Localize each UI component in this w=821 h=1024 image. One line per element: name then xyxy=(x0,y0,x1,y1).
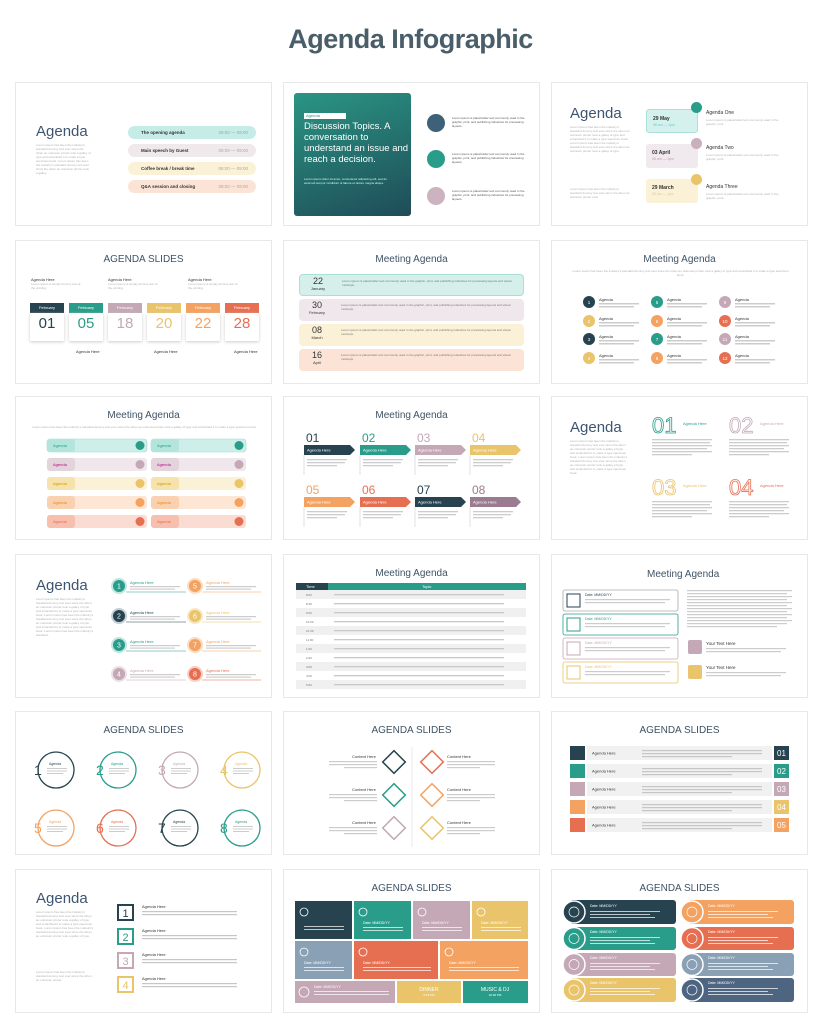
panel: slide 10 numbered circles list xyxy=(15,554,272,698)
panel: slide 1 agenda pills: Main speech by Guest xyxy=(141,148,189,153)
panel: slide 14 diamonds: Content Here xyxy=(352,754,377,759)
panel: slide 8 numbered arrows: 05 xyxy=(306,483,320,497)
panel: slide 8 numbered arrows: Meeting Agenda xyxy=(375,410,448,421)
panel: slide 2 discussion topics xyxy=(283,82,540,226)
panel: slide 14 diamonds: Content Here xyxy=(447,820,472,825)
panel: slide 3 agenda dates: Agenda Three xyxy=(706,184,738,190)
panel: slide 4 february dates: February xyxy=(78,305,94,310)
panel: slide 8 numbered arrows: Agenda Here xyxy=(418,448,442,452)
panel: slide 13 eight ring circles: Agenda xyxy=(173,820,185,824)
panel: slide 6 twelve agenda circles: Agenda xyxy=(735,297,750,302)
panel: slide 8 numbered arrows: Agenda Here xyxy=(473,500,497,504)
panel: slide 6 twelve agenda circles: 12 xyxy=(722,356,728,361)
panel: slide 12 calendar list: Date: MM/DD/YY xyxy=(585,617,613,621)
panel: slide 13 eight ring circles: Agenda xyxy=(49,762,61,766)
panel: slide 6 twelve agenda circles: 2 xyxy=(588,319,591,324)
panel: slide 3 agenda dates: Lorem ipsum has been the industry's standard dummy text ever since the when an unknown printer took a galley of type and scrambled it to make a type specimen book. Lorem ipsum has been the industry's standard dummy text ever since the when an unknown printer took a galley of type. xyxy=(570,125,630,153)
panel: slide 6 twelve agenda circles: 8 xyxy=(656,356,659,361)
panel: slide 7 two-column agenda pills: Agenda xyxy=(53,481,68,486)
panel: slide 18 two-column pills: Date: MM/DD/YY xyxy=(590,981,618,985)
panel: slide 5 meeting agenda dates: Meeting Agenda xyxy=(375,254,448,265)
panel: slide 15 icon rows with numbers: 02 xyxy=(777,767,786,776)
panel: slide 11 time table: 10:30 xyxy=(306,629,314,633)
panel: slide 6 twelve agenda circles: 1 xyxy=(588,300,591,305)
panel: slide 16 numbered squares xyxy=(15,869,272,1013)
panel: slide 6 twelve agenda circles: 5 xyxy=(656,300,659,305)
panel: slide 14 diamonds: Content Here xyxy=(352,787,377,792)
panel: slide 7 two-column agenda pills: Agenda xyxy=(53,500,68,505)
panel: slide 6 twelve agenda circles: 11 xyxy=(723,337,728,342)
panel: slide 15 icon rows with numbers: Agenda Here xyxy=(592,822,616,828)
panel: slide 3 agenda dates: Agenda One xyxy=(706,110,734,116)
panel: slide 9 outline numbers: Agenda Here xyxy=(683,483,707,488)
panel: slide 7 two-column agenda pills: Agenda xyxy=(53,462,68,467)
panel: slide 18 two-column pills: Date: MM/DD/YY xyxy=(708,956,736,960)
panel: slide 3 agenda dates: Lorem ipsum is placeholder text commonly used in the graphic, print. xyxy=(706,118,778,126)
panel: slide 12 calendar list: Meeting Agenda xyxy=(647,569,719,580)
panel: slide 4 february dates: 01 xyxy=(39,315,55,332)
panel: slide 7 two-column agenda pills xyxy=(15,396,272,540)
panel: slide 2 discussion topics: Lorem ipsum dolor sit amet, consectetur adipiscing elit, sed do eiusmod tempor incididunt ut labore et dolore magna aliqua. xyxy=(304,177,387,185)
panel: slide 4 february dates: February xyxy=(234,305,250,310)
panel: slide 3 agenda dates: 08 am — 1pm xyxy=(653,123,675,127)
panel: slide 3 agenda dates: 08 am — 1pm xyxy=(652,192,674,196)
panel: slide 8 numbered arrows: 04 xyxy=(472,431,486,445)
panel: slide 13 eight ring circles: 7 xyxy=(158,820,166,836)
panel: slide 10 numbered circles list: 4 xyxy=(117,672,121,678)
panel: slide 13 eight ring circles: Agenda xyxy=(111,762,123,766)
panel: slide 3 agenda dates: 29 March xyxy=(652,185,674,191)
panel: slide 8 numbered arrows: Agenda Here xyxy=(363,500,387,504)
panel: slide 11 time table: 8:00 xyxy=(306,593,312,597)
panel: slide 4 february dates: February xyxy=(195,305,211,310)
panel: slide 1 agenda pills: 08:00 — 09:00 xyxy=(218,148,248,153)
panel: slide 17 mosaic: Date: MM/DD/YY xyxy=(481,921,509,925)
panel: slide 5 meeting agenda dates: 16 xyxy=(312,350,322,360)
panel: slide 12 calendar list xyxy=(551,554,808,698)
panel: slide 4 february dates: February xyxy=(117,305,133,310)
panel: slide 18 two-column pills: Date: MM/DD/YY xyxy=(590,956,618,960)
panel: slide 12 calendar list: Date: MM/DD/YY xyxy=(585,665,613,669)
panel: slide 6 twelve agenda circles: Agenda xyxy=(735,316,750,321)
panel: slide 10 numbered circles list: Agenda Here xyxy=(206,639,230,644)
panel: slide 7 two-column agenda pills: Agenda xyxy=(53,443,68,448)
panel: slide 12 calendar list: Your Text Here xyxy=(706,641,736,646)
panel: slide 17 mosaic: Date: MM/DD/YY xyxy=(449,961,477,965)
panel: slide 6 twelve agenda circles xyxy=(551,240,808,384)
panel: slide 14 diamonds xyxy=(283,711,540,855)
panel: slide 4 february dates: 22 xyxy=(195,315,211,332)
panel: slide 5 meeting agenda dates: January xyxy=(311,286,325,291)
panel: slide 14 diamonds: Content Here xyxy=(447,787,472,792)
panel: slide 3 agenda dates: 03 April xyxy=(652,150,670,156)
panel: slide 11 time table: 9:00 xyxy=(306,611,312,615)
panel: slide 16 numbered squares: 1 xyxy=(122,908,129,920)
panel: slide 16 numbered squares: Lorem ipsum has been the industry's standard dummy text ever since the when an unknown printer took a galley of type and scrambled it to make a type specimen book. Lorem ipsum has been the industry's standard dummy text ever since the when an unknown printer took a galley of type. xyxy=(36,910,93,938)
panel: slide 4 february dates: Agenda Here xyxy=(234,349,258,354)
panel: slide 11 time table: Topic xyxy=(422,584,431,589)
panel: slide 4 february dates: AGENDA SLIDES xyxy=(103,254,184,265)
panel: slide 4 february dates: 28 xyxy=(234,315,250,332)
panel: slide 7 two-column agenda pills: Meeting Agenda xyxy=(107,410,180,421)
panel: slide 8 numbered arrows: Agenda Here xyxy=(418,500,442,504)
panel: slide 14 diamonds: AGENDA SLIDES xyxy=(371,725,452,736)
panel: slide 5 meeting agenda dates: 08 xyxy=(312,325,322,335)
panel: slide 10 numbered circles list: 1 xyxy=(117,584,121,590)
panel: slide 10 numbered circles list: 3 xyxy=(117,642,121,650)
panel: slide 9 outline numbers: Agenda Here xyxy=(683,421,707,426)
panel: slide 9 outline numbers: Agenda xyxy=(570,419,622,436)
panel: slide 9 outline numbers: 04 xyxy=(729,475,753,500)
panel: slide 9 outline numbers: 02 xyxy=(729,413,753,438)
panel: slide 18 two-column pills xyxy=(551,869,808,1013)
panel: slide 4 february dates: Agenda Here xyxy=(76,349,100,354)
panel: slide 13 eight ring circles: Agenda xyxy=(111,820,123,824)
panel: slide 13 eight ring circles: 4 xyxy=(220,762,228,778)
panel: slide 13 eight ring circles: Agenda xyxy=(173,762,185,766)
panel: slide 13 eight ring circles: 5 xyxy=(34,820,42,836)
panel: slide 17 mosaic: Date: MM/DD/YY xyxy=(304,961,332,965)
panel: slide 8 numbered arrows: Agenda Here xyxy=(307,448,331,452)
panel: slide 3 agenda dates: 29 May xyxy=(653,116,670,122)
panel: slide 3 agenda dates: 08 am — 1pm xyxy=(652,157,674,161)
panel: slide 6 twelve agenda circles: Agenda xyxy=(599,316,614,321)
panel: slide 8 numbered arrows: 01 xyxy=(306,431,320,445)
panel: slide 11 time table: Time xyxy=(306,584,316,589)
panel: slide 7 two-column agenda pills: Agenda xyxy=(53,519,68,524)
panel: slide 8 numbered arrows: Agenda Here xyxy=(473,448,497,452)
title: Agenda Infographic xyxy=(288,24,533,54)
panel: slide 6 twelve agenda circles: Agenda xyxy=(667,334,682,339)
panel: slide 1 agenda pills xyxy=(15,82,272,226)
panel: slide 1 agenda pills: Q&A session and closing xyxy=(141,184,195,189)
panel: slide 18 two-column pills: AGENDA SLIDES xyxy=(639,883,720,894)
panel: slide 9 outline numbers: Lorem ipsum has been the industry's standard dummy text ever since the when an unknown printer took a galley of type and scrambled it to make a type specimen book. Lorem ipsum has been the industry's standard dummy text ever since the when an unknown printer took a galley of type and scrambled it to make a type specimen book. xyxy=(570,439,627,475)
panel: slide 2 discussion topics: Lorem ipsum is placeholder text commonly used in the graphic, print, and publishing industries for previewing layouts. xyxy=(452,116,524,128)
panel: slide 4 february dates xyxy=(15,240,272,384)
panel: slide 10 numbered circles list: 7 xyxy=(193,642,197,650)
panel: slide 11 time table: 8:30 xyxy=(306,602,312,606)
panel: slide 8 numbered arrows: Agenda Here xyxy=(307,500,331,504)
panel: slide 11 time table: 11:00 xyxy=(306,638,314,642)
panel: slide 15 icon rows with numbers: 03 xyxy=(777,785,786,794)
panel: slide 5 meeting agenda dates: Lorem ipsum is placeholder text commonly used in the graphic, print, and publishing industries for previewing layouts and visual mockups. xyxy=(341,328,510,336)
panel: slide 1 agenda pills: 08:00 — 09:00 xyxy=(218,130,248,135)
panel: slide 10 numbered circles list: Lorem ipsum has been the industry's standard dummy text ever since the when an unknown printer took a galley of type and scrambled it to make a type specimen book. Lorem ipsum has been the industry's standard dummy text ever since the when an unknown printer took a galley of type and scrambled it to make a type specimen book. Lorem ipsum has been the industry's standard. xyxy=(36,597,93,637)
panel: slide 2 discussion topics: Agenda xyxy=(306,113,320,118)
panel: slide 12 calendar list: Date: MM/DD/YY xyxy=(585,593,613,597)
panel: slide 13 eight ring circles: AGENDA SLIDES xyxy=(103,725,184,736)
panel: slide 13 eight ring circles: Agenda xyxy=(235,820,247,824)
panel: slide 16 numbered squares: Agenda Here xyxy=(142,928,166,933)
panel: slide 15 icon rows with numbers: Agenda Here xyxy=(592,804,616,810)
panel: slide 5 meeting agenda dates: Lorem ipsum is placeholder text commonly used in the graphic, print, and publishing industries for previewing layouts and visual mockups. xyxy=(341,353,510,361)
panel: slide 7 two-column agenda pills: Agenda xyxy=(157,519,172,524)
panel: slide 17 mosaic: Date: MM/DD/YY xyxy=(363,921,391,925)
panel: slide 15 icon rows with numbers: Agenda Here xyxy=(592,768,616,774)
panel: slide 18 two-column pills: Date: MM/DD/YY xyxy=(708,904,736,908)
panel: slide 10 numbered circles list: Agenda Here xyxy=(130,610,154,615)
panel: slide 4 february dates: Agenda Here xyxy=(108,277,132,282)
panel: slide 5 meeting agenda dates: 30 xyxy=(312,300,322,310)
panel: slide 11 time table: 10:00 xyxy=(306,620,314,624)
panel: slide 8 numbered arrows: 07 xyxy=(417,483,431,497)
panel: slide 17 mosaic xyxy=(283,869,540,1013)
panel: slide 17 mosaic: DINNER xyxy=(419,987,439,993)
panel: slide 9 outline numbers xyxy=(551,396,808,540)
panel: slide 15 icon rows with numbers: Agenda Here xyxy=(592,786,616,792)
panel: slide 11 time table: 5:00 xyxy=(306,683,312,687)
panel: slide 9 outline numbers: 01 xyxy=(652,413,676,438)
panel: slide 8 numbered arrows: 03 xyxy=(417,431,431,445)
panel: slide 10 numbered circles list: 2 xyxy=(117,614,121,620)
panel: slide 5 meeting agenda dates xyxy=(283,240,540,384)
panel: slide 13 eight ring circles: 2 xyxy=(96,762,104,778)
panel: slide 4 february dates: February xyxy=(156,305,172,310)
panel: slide 14 diamonds: Content Here xyxy=(352,820,377,825)
panel: slide 18 two-column pills: Date: MM/DD/YY xyxy=(590,930,618,934)
panel: slide 17 mosaic: Date: MM/DD/YY xyxy=(422,921,450,925)
panel: slide 6 twelve agenda circles: Agenda xyxy=(667,316,682,321)
panel: slide 11 time table: 4:00 xyxy=(306,674,312,678)
panel: slide 13 eight ring circles: 3 xyxy=(158,762,166,778)
panel: slide 17 mosaic: Date: MM/DD/YY xyxy=(363,961,391,965)
panel: slide 9 outline numbers: 03 xyxy=(652,475,676,500)
panel: slide 15 icon rows with numbers: Agenda Here xyxy=(592,750,616,756)
panel: slide 5 meeting agenda dates: March xyxy=(311,335,323,340)
panel: slide 11 time table: 1:00 xyxy=(306,647,312,651)
panel: slide 15 icon rows with numbers: 01 xyxy=(777,749,786,758)
panel: slide 5 meeting agenda dates: 22 xyxy=(313,276,323,286)
panel: slide 6 twelve agenda circles: Lorem ipsum has been the industry's standard dummy text ever since the when an unknown printer took a galley of type and scrambled it to make a type specimen book. xyxy=(572,269,789,277)
panel: slide 3 agenda dates: Agenda xyxy=(570,105,622,122)
panel: slide 1 agenda pills: Coffee break / break time xyxy=(141,166,195,171)
panel: slide 6 twelve agenda circles: 6 xyxy=(656,319,659,324)
panel: slide 6 twelve agenda circles: 9 xyxy=(724,300,727,305)
panel: slide 15 icon rows with numbers: 04 xyxy=(777,803,786,812)
panel: slide 11 time table xyxy=(283,554,540,698)
panel: slide 4 february dates: Agenda Here xyxy=(31,277,55,282)
panel: slide 9 outline numbers: Agenda Here xyxy=(760,421,784,426)
panel: slide 1 agenda pills: 08:00 — 09:00 xyxy=(218,184,248,189)
panel: slide 7 two-column agenda pills: Lorem ipsum has been the industry's standard dummy text ever since the when an unknown printer took a galley of type and scrambled it to make a type specimen book. xyxy=(32,425,257,429)
panel: slide 15 icon rows with numbers xyxy=(551,711,808,855)
panel: slide 7 two-column agenda pills: Agenda xyxy=(157,500,172,505)
panel: slide 4 february dates: Agenda Here xyxy=(154,349,178,354)
panel: slide 3 agenda dates: Lorem ipsum is placeholder text commonly used in the graphic, print. xyxy=(706,153,778,161)
panel: slide 12 calendar list: Your Text Here xyxy=(706,665,736,670)
panel: slide 6 twelve agenda circles: Agenda xyxy=(599,353,614,358)
panel: slide 18 two-column pills: Date: MM/DD/YY xyxy=(708,930,736,934)
panel: slide 8 numbered arrows: 06 xyxy=(362,483,376,497)
panel: slide 3 agenda dates: Agenda Two xyxy=(706,145,734,151)
panel: slide 10 numbered circles list: 6 xyxy=(193,614,197,620)
panel: slide 6 twelve agenda circles: Meeting Agenda xyxy=(643,254,716,265)
panel: slide 7 two-column agenda pills: Agenda xyxy=(157,462,172,467)
panel: slide 13 eight ring circles xyxy=(15,711,272,855)
panel: slide 10 numbered circles list: Agenda Here xyxy=(130,639,154,644)
panel: slide 10 numbered circles list: Agenda Here xyxy=(206,580,230,585)
panel: slide 12 calendar list: Date: MM/DD/YY xyxy=(585,641,613,645)
panel: slide 7 two-column agenda pills: Agenda xyxy=(157,481,172,486)
panel: slide 6 twelve agenda circles: 10 xyxy=(722,319,728,324)
panel: slide 3 agenda dates: Lorem ipsum has been the industry's standard dummy text ever since the when an unknown printer took. xyxy=(570,187,630,199)
panel: slide 6 twelve agenda circles: 7 xyxy=(656,337,659,342)
panel: slide 16 numbered squares: Agenda Here xyxy=(142,904,166,909)
panel: slide 4 february dates: 18 xyxy=(117,315,133,332)
panel: slide 6 twelve agenda circles: 3 xyxy=(588,337,591,342)
panel: slide 15 icon rows with numbers: 05 xyxy=(777,821,786,830)
panel: slide 13 eight ring circles: Agenda xyxy=(235,762,247,766)
panel: slide 1 agenda pills: The opening agenda xyxy=(141,130,185,135)
panel: slide 16 numbered squares: Agenda xyxy=(36,890,88,907)
panel: slide 13 eight ring circles: 6 xyxy=(96,820,104,836)
panel: slide 13 eight ring circles: 1 xyxy=(34,762,42,778)
panel: slide 4 february dates: Lorem ipsum is simply dummy text of the printing. xyxy=(188,282,237,290)
panel: slide 18 two-column pills: Date: MM/DD/YY xyxy=(590,904,618,908)
panel: slide 6 twelve agenda circles: Agenda xyxy=(667,297,682,302)
panel: slide 13 eight ring circles: Agenda xyxy=(49,820,61,824)
panel: slide 2 discussion topics: Lorem ipsum is placeholder text commonly used in the graphic, print, and publishing industries for previewing layouts. xyxy=(452,189,524,201)
panel: slide 8 numbered arrows: Agenda Here xyxy=(363,448,387,452)
panel: slide 17 mosaic: 10:30 PM xyxy=(489,993,502,997)
panel: slide 10 numbered circles list: Agenda Here xyxy=(130,580,154,585)
panel: slide 5 meeting agenda dates: April xyxy=(313,360,321,365)
panel: slide 1 agenda pills: 08:00 — 09:00 xyxy=(218,166,248,171)
panel: slide 3 agenda dates: Lorem ipsum is placeholder text commonly used in the graphic, print. xyxy=(706,192,778,200)
panel: slide 14 diamonds: Content Here xyxy=(447,754,472,759)
panel: slide 4 february dates: 05 xyxy=(78,315,94,332)
panel: slide 16 numbered squares: 3 xyxy=(122,956,129,968)
panel: slide 6 twelve agenda circles: 4 xyxy=(588,356,591,361)
panel: slide 4 february dates: Agenda Here xyxy=(188,277,212,282)
panel: slide 10 numbered circles list: Agenda Here xyxy=(206,668,230,673)
panel: slide 11 time table: Meeting Agenda xyxy=(375,568,448,579)
panel: slide 5 meeting agenda dates: February xyxy=(309,310,325,315)
panel: slide 8 numbered arrows xyxy=(283,396,540,540)
panel: slide 16 numbered squares: Agenda Here xyxy=(142,952,166,957)
panel: slide 13 eight ring circles: 8 xyxy=(220,820,228,836)
panel: slide 5 meeting agenda dates: Lorem ipsum is placeholder text commonly used in the graphic, print, and publishing industries for previewing layouts and visual mockups. xyxy=(341,303,510,311)
panel: slide 6 twelve agenda circles: Agenda xyxy=(599,334,614,339)
panel: slide 17 mosaic: AGENDA SLIDES xyxy=(371,883,452,894)
panel: slide 11 time table: 2:00 xyxy=(306,656,312,660)
panel: slide 8 numbered arrows: 02 xyxy=(362,431,376,445)
panel: slide 3 agenda dates xyxy=(551,82,808,226)
panel: slide 8 numbered arrows: 08 xyxy=(472,483,486,497)
panel: slide 17 mosaic: 6:15 PM xyxy=(423,993,435,997)
panel: slide 16 numbered squares: Lorem ipsum has been the industry's standard dummy text ever since the when an unknown printer. xyxy=(36,970,92,982)
panel: slide 17 mosaic: Date: MM/DD/YY xyxy=(314,985,342,989)
panel: slide 1 agenda pills: Agenda xyxy=(36,123,88,140)
panel: slide 18 two-column pills: Date: MM/DD/YY xyxy=(708,981,736,985)
panel: slide 10 numbered circles list: 8 xyxy=(193,672,197,678)
panel: slide 10 numbered circles list: 5 xyxy=(193,584,197,590)
panel: slide 16 numbered squares: 4 xyxy=(122,980,129,992)
panel: slide 4 february dates: 20 xyxy=(156,315,172,332)
panel: slide 6 twelve agenda circles: Agenda xyxy=(735,334,750,339)
panel: slide 10 numbered circles list: Agenda Here xyxy=(130,668,154,673)
panel: slide 2 discussion topics: Discussion Topics. A conversation to understand an issue and reach a decision. xyxy=(304,121,408,165)
panel: slide 6 twelve agenda circles: Agenda xyxy=(667,353,682,358)
panel: slide 10 numbered circles list: Agenda Here xyxy=(206,610,230,615)
panel: slide 5 meeting agenda dates: Lorem ipsum is placeholder text commonly used in the graphic, print, and publishing industries for previewing layouts and visual mockups. xyxy=(342,279,511,287)
panel: slide 16 numbered squares: 2 xyxy=(122,932,129,944)
panel: slide 9 outline numbers: Agenda Here xyxy=(760,483,784,488)
panel: slide 2 discussion topics: Lorem ipsum is placeholder text commonly used in the graphic, print, and publishing industries for previewing layouts. xyxy=(452,152,524,164)
panel: slide 6 twelve agenda circles: Agenda xyxy=(599,297,614,302)
panel: slide 7 two-column agenda pills: Agenda xyxy=(157,443,172,448)
panel: slide 17 mosaic: MUSIC & DJ xyxy=(481,987,510,993)
panel: slide 1 agenda pills: Lorem ipsum has been the industry's standard dummy text ever since the when an unknown printer took a galley of type and scrambled it to make a type specimen book. Lorem ipsum has been the industry's standard dummy text ever since the when an unknown printer took a galley. xyxy=(36,143,91,175)
panel: slide 4 february dates: February xyxy=(39,305,55,310)
panel: slide 6 twelve agenda circles: Agenda xyxy=(735,353,750,358)
panel: slide 10 numbered circles list: Agenda xyxy=(36,577,88,594)
panel: slide 11 time table: 3:00 xyxy=(306,665,312,669)
panel: slide 15 icon rows with numbers: AGENDA SLIDES xyxy=(639,725,720,736)
panel: slide 4 february dates: Lorem ipsum is simply dummy text of the printing. xyxy=(108,282,157,290)
panel: slide 4 february dates: Lorem ipsum is simply dummy text of the printing. xyxy=(31,282,80,290)
panel: slide 16 numbered squares: Agenda Here xyxy=(142,976,166,981)
